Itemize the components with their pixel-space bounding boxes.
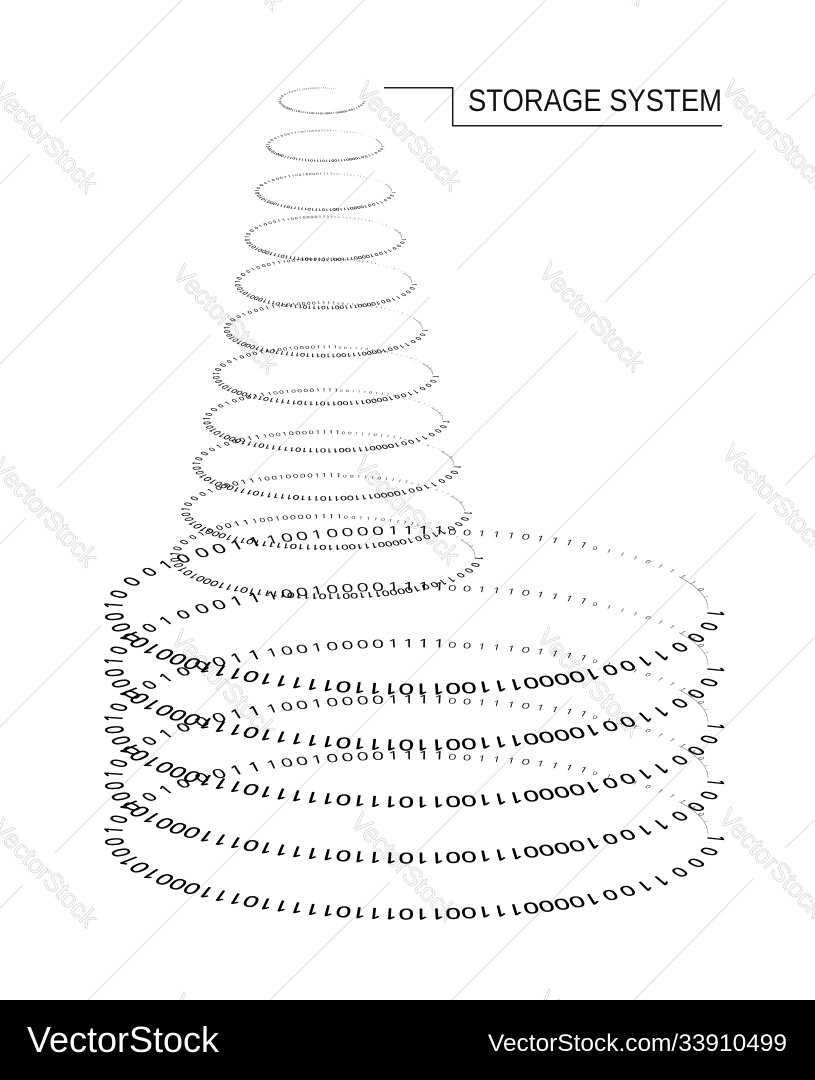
watermarks: VectorStock (533, 256, 652, 378)
large binary ring 5: 100011001000011100110111011111011100010100100010001110010000111100111011110111011110 110111 (104, 751, 724, 920)
footer image id: VectorStock.com/33910499 (488, 1030, 787, 1057)
watermarks: VectorStock (165, 623, 284, 745)
watermarks: VectorStock (167, 258, 286, 380)
binary ring 11: 10001100100001110011011101111101110001010010001000111001000011110011101111 0111011110 110111 (170, 514, 484, 600)
binary ring 7: 10001100100001110011011101111101110001010010001000111001000011110011101111 0111011110 110111 (212, 346, 439, 406)
large binary ring 2: 100011001000011100110111011111011100010100100010001110010000111100111011110111011110 110111 (104, 582, 724, 751)
footer bar (0, 1000, 815, 1080)
large binary ring 3: 100011001000011100110111011111011100010100100010001110010000111100111011110111011110 110111 (104, 639, 724, 808)
watermarks: VectorStock (350, 75, 469, 197)
watermarks: VectorStock (531, 621, 650, 743)
binary ring 6: 10001100100001110011011101111101110001010010001000111001000011110011101111 0111011110 110111 (224, 301, 428, 358)
title leader line (384, 88, 722, 126)
binary ring 8: 10001100100001110011011101111101110001010010001000111001000011110011101111 0111011110 110111 (202, 388, 450, 453)
large binary ring 4: 100011001000011100110111011111011100010100100010001110010000111100111011110111011110 110111 (104, 695, 724, 864)
watermarks: VectorStock (345, 806, 464, 928)
binary ring 4: 10001100100001110011011101111101110001010010001000111001000011110011101111 0111011110 110111 (244, 216, 406, 262)
binary ring 1 (top of tower): 1000 1100 10000111001101110111110111000101001000100011100100001111 00111 (278, 87, 366, 114)
binary ring 5: 10001100100001110011011101111101110001010010001000111001000011110011101111 0111011110 110111 (234, 258, 417, 310)
footer brand: VectorStock (27, 1019, 220, 1060)
large binary ring 1: 100011001000011100110111011111011100010100100010001110010000111100111011110111011110 110111 (104, 526, 724, 695)
binary ring 2: 1000 110010000111001101110111110111000101001000100011100100001111 0011101111 0111011110 110111 (266, 130, 384, 162)
binary ring 10: 10001100100001110011011101111101110001010010001000111001000011110011101111 0111011110 110111 (181, 473, 472, 550)
binary ring 9: 10001100100001110011011101111101110001010010001000111001000011110011101111 0111011110 110111 (192, 430, 461, 501)
title: STORAGE SYSTEM (468, 82, 722, 118)
watermarks: VectorStock (348, 449, 467, 571)
binary ring 3: 1000110010000111001101110111110111000101001000100011100100001111 0011101111 0111011110 110111 (255, 172, 396, 211)
